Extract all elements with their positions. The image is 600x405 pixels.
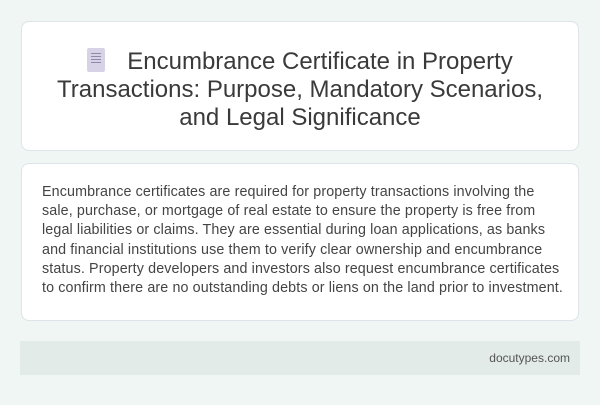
description card: [21, 163, 579, 321]
description text: and financial institutions use them to verify clear ownership and encumbrance: [42, 242, 542, 258]
footer: [20, 341, 580, 375]
title: Encumbrance Certificate in Property Transactions: Purpose, Mandatory Scenarios, and Legal Significance: [57, 48, 543, 131]
description text: to confirm there are no outstanding debts or liens on the land prior to investment.: [42, 280, 563, 296]
icon: document: [87, 48, 105, 72]
description text: status. Property developers and investors also request encumbrance certificates: [42, 261, 559, 277]
description text: sale, purchase, or mortgage of real estate to ensure the property is free from: [42, 203, 535, 219]
description text: legal liabilities or claims. They are essential during loan applications, as banks: [42, 222, 545, 238]
description text: Encumbrance certificates are required for property transactions involving the: [42, 184, 534, 200]
title card: [21, 21, 579, 151]
description text: [42, 184, 563, 296]
footer source: docutypes.com: [489, 351, 570, 365]
